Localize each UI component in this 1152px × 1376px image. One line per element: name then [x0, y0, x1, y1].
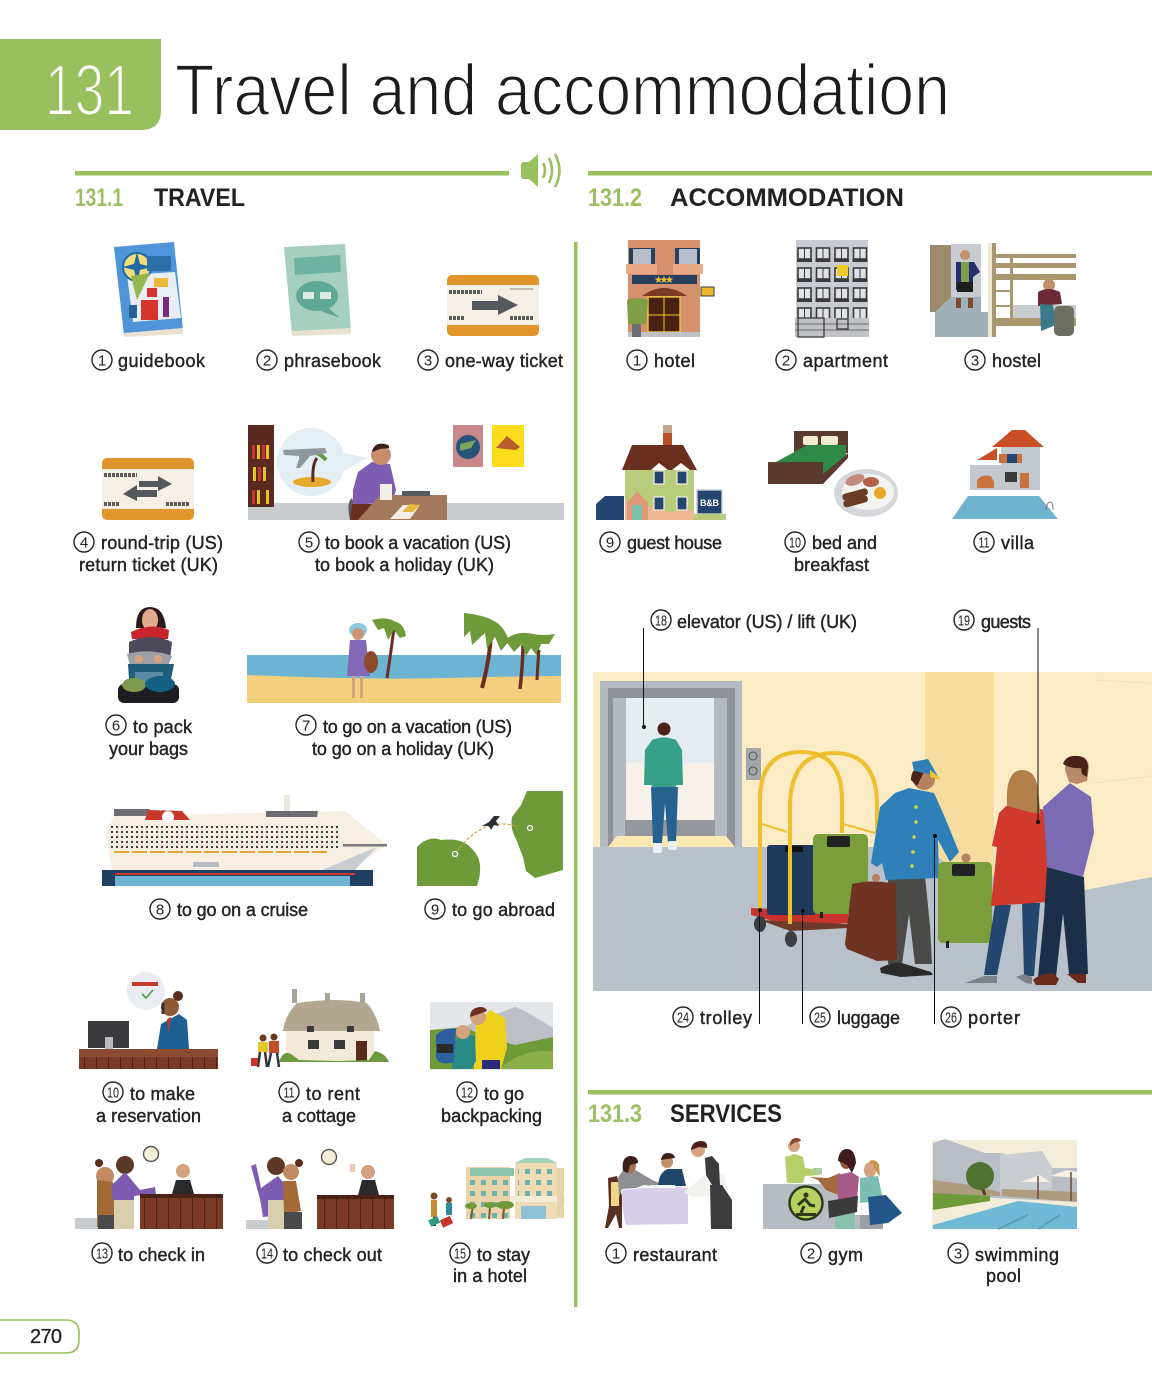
label: one-way ticket: one-way ticket	[445, 351, 563, 371]
icon: cruise ship	[102, 795, 387, 886]
label: to make a reservation	[96, 1082, 201, 1126]
elevator	[600, 681, 761, 847]
section heading: 131.3 services: 131.3	[588, 1100, 642, 1128]
label: guests: 19	[958, 612, 970, 630]
label: gym: gym	[828, 1245, 863, 1265]
label: round-trip / return ticket: round-trip (US)	[101, 533, 223, 553]
man guest	[1033, 756, 1094, 985]
icon: guest house: B&B	[700, 498, 720, 508]
label: phrasebook: phrasebook	[284, 351, 382, 371]
page number tab: 270	[30, 1326, 62, 1348]
label: to pack your bags	[106, 715, 193, 759]
label: hostel: hostel	[992, 351, 1041, 371]
label: hotel	[627, 350, 695, 371]
chapter number banner: 131	[45, 51, 134, 131]
icon: hotel	[626, 240, 714, 337]
icon: phrasebook	[284, 244, 351, 336]
label: to go on a vacation / holiday	[296, 715, 512, 759]
icon: hotel: ★★★	[654, 275, 674, 286]
label: porter: 26	[945, 1010, 957, 1026]
label: round-trip / return ticket: return ticket (UK)	[79, 555, 218, 575]
label: trolley: trolley	[700, 1008, 752, 1028]
label: to make a reservation: a reservation	[96, 1106, 201, 1126]
label: apartment: apartment	[803, 351, 888, 371]
label: villa	[974, 532, 1035, 553]
label: elevator / lift: 18	[655, 612, 667, 630]
brown suitcase	[845, 874, 897, 961]
label: swimming pool: swimming	[975, 1245, 1059, 1265]
section heading: 131.2 accommodation: 131.2	[588, 184, 642, 212]
icon: hostel	[930, 243, 1076, 337]
chapter number banner	[0, 39, 161, 131]
leader: trolley	[758, 908, 762, 1024]
label: swimming pool	[948, 1243, 1059, 1286]
leader: elevator	[642, 628, 646, 729]
icon: packing bags	[118, 607, 179, 703]
label: to go abroad: to go abroad	[452, 900, 555, 920]
label: elevator / lift: elevator (US) / lift (UK)	[677, 612, 857, 632]
label: to go on a vacation / holiday: to go on a vacation (US)	[323, 717, 512, 737]
section heading: 131.2 accommodation	[588, 171, 1152, 212]
label: to go on a cruise: to go on a cruise	[177, 900, 308, 920]
icon: renting a cottage	[251, 989, 389, 1067]
label: bed and breakfast: breakfast	[794, 555, 869, 575]
section heading: 131.1 travel: TRAVEL	[154, 184, 245, 212]
icon: bed and breakfast	[768, 431, 898, 517]
woman guest	[965, 770, 1049, 984]
title: Travel and accommodation	[175, 51, 950, 131]
label: to pack your bags: 6	[112, 718, 120, 734]
section heading: 131.3 services: SERVICES	[670, 1100, 782, 1128]
label: guest house: guest house	[627, 533, 722, 553]
label: round-trip / return ticket	[74, 532, 223, 575]
label: to go backpacking	[441, 1082, 542, 1126]
label: trolley	[673, 1007, 752, 1028]
label: guests	[954, 610, 1031, 632]
icon: apartment	[795, 240, 869, 337]
label: to book a vacation / holiday	[299, 532, 511, 575]
label: to rent a cottage: 11	[284, 1084, 294, 1102]
label: to stay in a hotel: 15	[454, 1246, 466, 1262]
label: to go backpacking: to go	[484, 1084, 524, 1104]
label: to stay in a hotel	[450, 1243, 530, 1286]
label: to go abroad: 9	[431, 902, 439, 918]
luggage on trolley	[767, 805, 868, 924]
section heading: 131.2 accommodation: ACCOMMODATION	[670, 184, 904, 212]
icon: beach vacation	[247, 613, 561, 703]
icon: checking out	[246, 1150, 394, 1229]
label: to rent a cottage: to rent	[306, 1084, 360, 1104]
label: to go backpacking: backpacking	[441, 1106, 542, 1126]
label: guidebook: guidebook	[118, 351, 206, 371]
page number tab	[0, 1320, 79, 1353]
label: luggage: luggage	[837, 1008, 900, 1028]
label: villa: villa	[1001, 533, 1035, 553]
icon: backpacking	[430, 1002, 553, 1070]
label: porter	[941, 1007, 1020, 1028]
label: luggage	[810, 1007, 900, 1028]
label: to rent a cottage: a cottage	[282, 1106, 356, 1126]
label: to book a vacation / holiday: to book a holiday (UK)	[315, 555, 494, 575]
trolley	[751, 752, 877, 947]
column divider	[574, 242, 578, 1307]
icon: round-trip ticket	[102, 458, 194, 520]
label: to go backpacking: 12	[461, 1084, 473, 1102]
right suitcase	[938, 862, 992, 948]
porter	[871, 759, 970, 977]
label: hostel	[965, 350, 1041, 371]
label: luggage: 25	[814, 1010, 826, 1026]
label: guest house: 9	[606, 534, 614, 552]
label: bed and breakfast: bed and	[812, 533, 877, 553]
icon: checking in	[75, 1146, 223, 1229]
icon: going abroad map	[417, 791, 563, 886]
label: to rent a cottage	[279, 1082, 360, 1126]
label: to check out: to check out	[283, 1245, 382, 1265]
label: hotel: hotel	[654, 351, 695, 371]
label: swimming pool: 3	[954, 1246, 962, 1262]
label: to book a vacation / holiday: 5	[305, 534, 313, 552]
icon: staying in a hotel	[428, 1158, 565, 1228]
label: trolley: 24	[677, 1010, 689, 1026]
label: villa: 11	[978, 534, 990, 552]
leader: guests	[1036, 628, 1040, 824]
icon: making a reservation	[79, 972, 218, 1069]
label: to check out: 14	[261, 1246, 273, 1262]
label: to check in	[92, 1243, 205, 1265]
icon: audio speaker	[521, 154, 560, 187]
icon: guest house	[596, 425, 726, 520]
label: to go on a vacation / holiday: 7	[302, 718, 310, 734]
icon: restaurant	[605, 1141, 732, 1229]
icon: villa	[952, 430, 1058, 519]
label: bed and breakfast	[785, 532, 877, 575]
man in elevator	[644, 722, 683, 853]
label: to check in: 13	[96, 1246, 108, 1262]
illustration: hotel lobby scene	[593, 672, 1152, 991]
label: gym	[801, 1243, 863, 1265]
section heading: 131.1 travel	[75, 171, 509, 212]
section heading: 131.1 travel: 131.1	[75, 184, 123, 212]
label: phrasebook: 2	[263, 352, 271, 370]
label: restaurant: 1	[612, 1246, 620, 1262]
label: porter: porter	[968, 1008, 1020, 1028]
label: to stay in a hotel: in a hotel	[453, 1266, 527, 1286]
label: round-trip / return ticket: 4	[80, 534, 88, 552]
label: restaurant: restaurant	[633, 1245, 717, 1265]
label: hostel: 3	[971, 352, 979, 370]
icon: one-way ticket	[447, 275, 539, 336]
label: one-way ticket: 3	[424, 352, 432, 370]
leader: luggage	[801, 909, 805, 1024]
icon: swimming pool	[932, 1139, 1077, 1229]
label: to go on a cruise: 8	[156, 902, 164, 918]
label: hotel: 1	[633, 352, 641, 370]
label: to pack your bags: to pack	[133, 717, 193, 737]
label: to make a reservation: 10	[107, 1084, 119, 1102]
label: restaurant	[606, 1243, 717, 1265]
label: gym: 2	[807, 1246, 815, 1262]
label: to make a reservation: to make	[130, 1084, 195, 1104]
label: to go on a vacation / holiday: to go on a holiday (UK)	[312, 739, 494, 759]
label: swimming pool: pool	[986, 1266, 1021, 1286]
label: bed and breakfast: 10	[789, 534, 801, 552]
section heading: 131.3 services	[588, 1090, 1152, 1128]
label: guidebook: 1	[98, 352, 106, 370]
leader: porter	[933, 834, 937, 1024]
label: to pack your bags: your bags	[109, 739, 188, 759]
label: to stay in a hotel: to stay	[477, 1245, 530, 1265]
icon: guidebook	[114, 242, 183, 337]
label: to check in: to check in	[118, 1245, 205, 1265]
icon: booking a vacation	[248, 425, 564, 520]
label: to book a vacation / holiday: to book a vacation (US)	[325, 533, 511, 553]
icon: gym	[763, 1138, 902, 1229]
label: guests: guests	[981, 612, 1031, 632]
label: apartment: 2	[782, 352, 790, 370]
